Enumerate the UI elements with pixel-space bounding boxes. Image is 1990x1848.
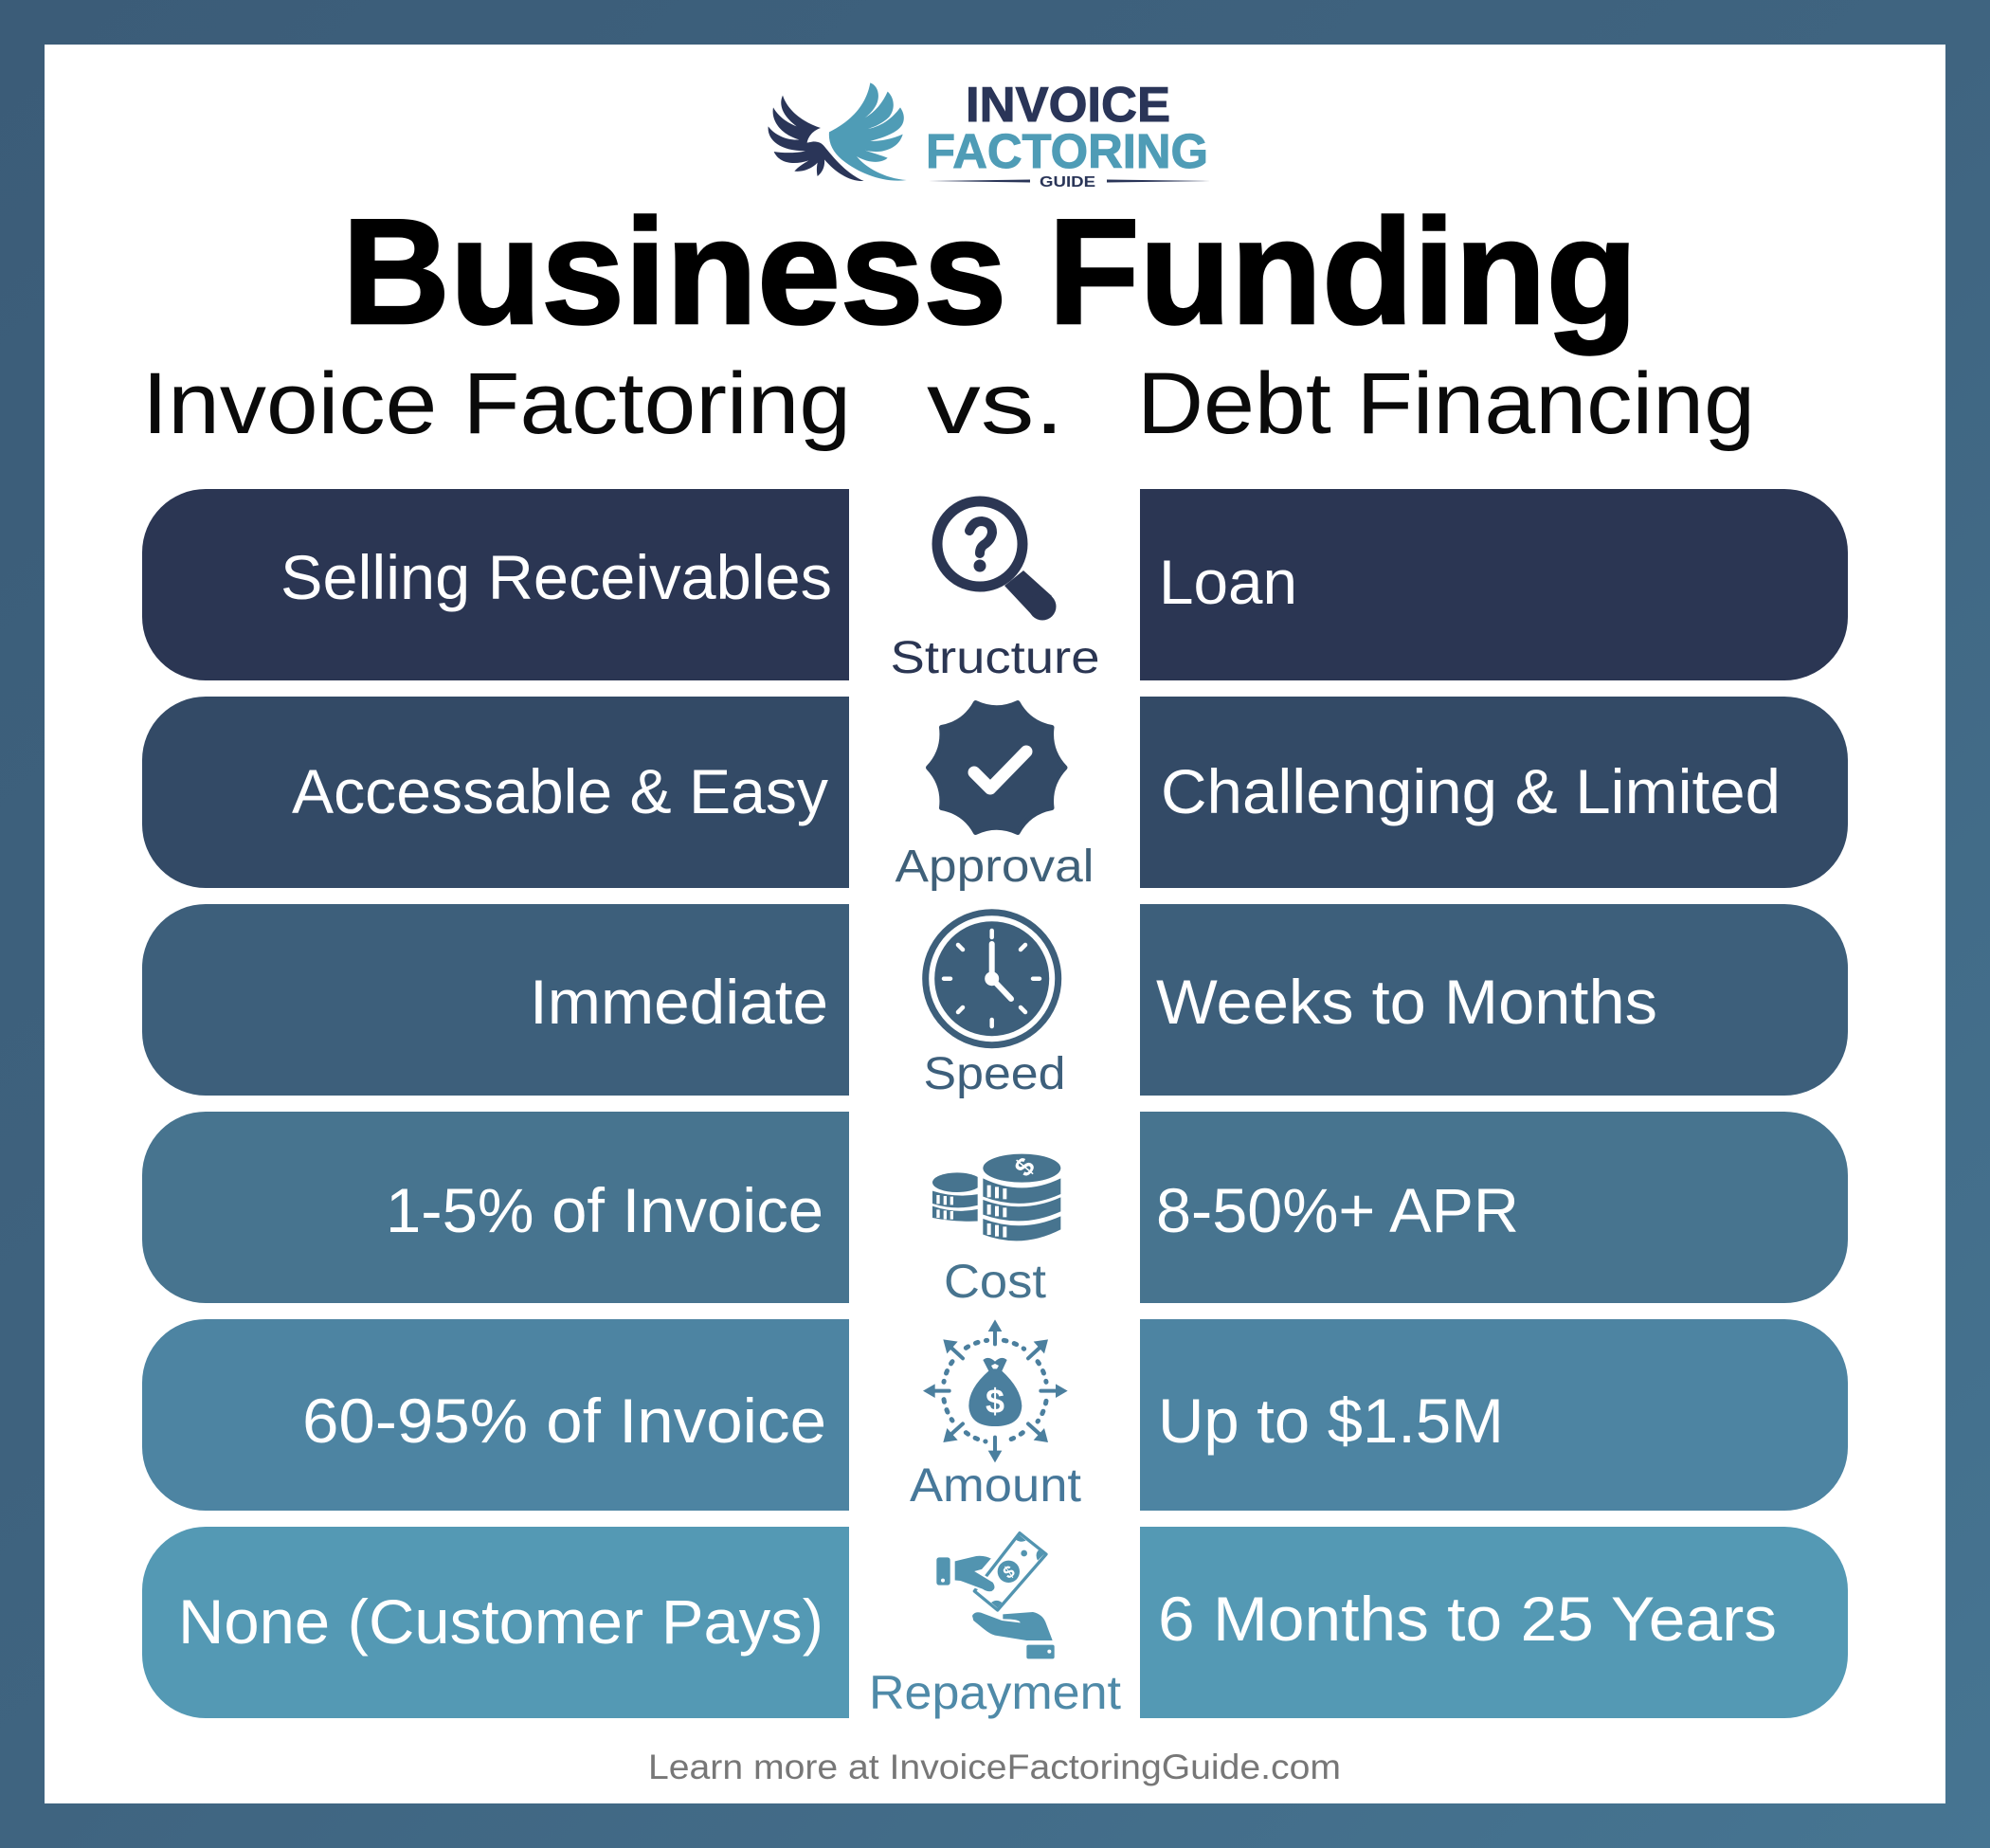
icon: money bag with arrows [923, 1319, 1068, 1462]
text: 6 Months to 25 Years: 6 Months to 25 Years [1158, 1584, 1777, 1654]
icon: magnifier with question mark [937, 501, 1056, 620]
text: 1-5% of Invoice: 1-5% of Invoice [386, 1175, 823, 1245]
icon: hands exchanging money [936, 1533, 1055, 1658]
text: 60-95% of Invoice: 60-95% of Invoice [302, 1386, 826, 1456]
logo: Invoice Factoring Guide [769, 78, 1210, 190]
logo rule right [1107, 180, 1210, 182]
icon: clock [926, 913, 1058, 1045]
text: Up to $1.5M: Up to $1.5M [1158, 1386, 1504, 1456]
icon: money bag with arrows: $ [986, 1382, 1004, 1421]
logo word: INVOICE: INVOICE [966, 78, 1170, 133]
text: None (Customer Pays): None (Customer Pays) [178, 1586, 823, 1657]
invoice factoring bar: cost [142, 1112, 849, 1303]
debt financing bar: amount [1140, 1319, 1848, 1511]
logo word: GUIDE: GUIDE [1040, 174, 1095, 190]
icon: badge with check mark [929, 703, 1065, 832]
row: Approval [142, 697, 1848, 892]
text: Immediate: Immediate [530, 967, 828, 1037]
icon: coin stacks: $ [1008, 1151, 1040, 1182]
text: 8-50%+ APR: 8-50%+ APR [1156, 1175, 1519, 1245]
text: Weeks to Months: Weeks to Months [1156, 967, 1657, 1037]
invoice factoring bar: repayment [142, 1527, 849, 1718]
debt financing bar: repayment [1140, 1527, 1848, 1718]
invoice factoring bar: structure [142, 489, 849, 680]
debt financing bar: cost [1140, 1112, 1848, 1303]
row: Repayment [142, 1527, 1848, 1719]
row: Speed [142, 904, 1848, 1099]
logo rule left [929, 180, 1030, 182]
icon: coin stacks [932, 1151, 1060, 1241]
title: Business Funding [342, 189, 1637, 355]
heading: Debt Financing: Debt Financing [1137, 355, 1755, 452]
icon: eagle [769, 82, 907, 181]
invoice factoring bar: approval [142, 697, 849, 888]
label: Speed: Speed [923, 1049, 1065, 1099]
text: Challenging & Limited: Challenging & Limited [1161, 756, 1781, 826]
label: Cost: Cost [944, 1255, 1046, 1308]
heading: vs.: vs. [927, 355, 1064, 452]
text: Selling Receivables: Selling Receivables [280, 542, 832, 612]
debt financing bar: speed [1140, 904, 1848, 1096]
row: Amount [142, 1319, 1848, 1512]
label: Approval: Approval [895, 842, 1094, 892]
label: Amount: Amount [910, 1458, 1081, 1512]
row: Cost [142, 1112, 1848, 1308]
text: Accessable & Easy: Accessable & Easy [292, 756, 828, 826]
heading: Invoice Factoring: Invoice Factoring [142, 355, 851, 452]
invoice factoring bar: speed [142, 904, 849, 1096]
label: Structure: Structure [891, 633, 1099, 683]
icon: hands exchanging money: $ [1000, 1562, 1019, 1583]
footer: Learn more at InvoiceFactoringGuide.com [648, 1748, 1341, 1786]
logo word: FACTORING: FACTORING [926, 124, 1208, 178]
debt financing bar: structure [1140, 489, 1848, 680]
debt financing bar: approval [1140, 697, 1848, 888]
row: Structure [142, 489, 1848, 683]
invoice factoring bar: amount [142, 1319, 849, 1511]
text: Loan: Loan [1159, 547, 1297, 617]
label: Repayment: Repayment [869, 1666, 1121, 1719]
